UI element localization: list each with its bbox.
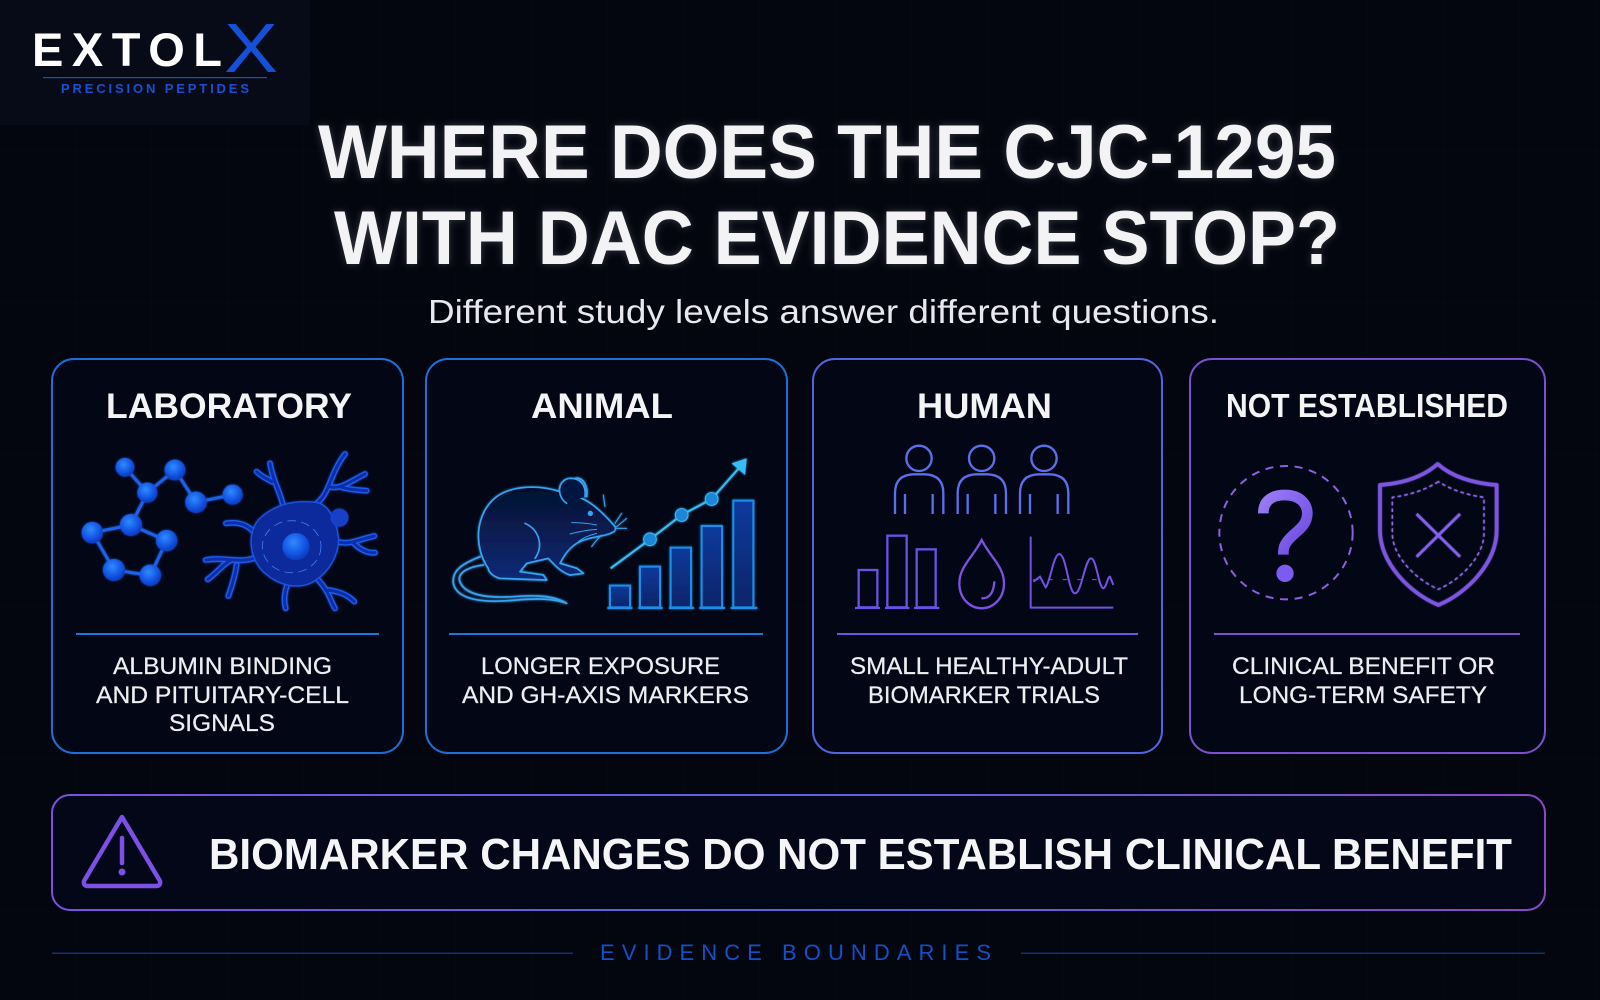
- body text: CLINICAL BENEFIT OR: [1232, 653, 1495, 680]
- body text: ALBUMIN BINDING: [113, 653, 332, 680]
- icon: bars: [855, 536, 939, 608]
- divider: [449, 633, 763, 635]
- icon: rat: [453, 478, 627, 603]
- heading: laboratory: LABORATORY: [106, 387, 352, 426]
- body text: AND PITUITARY-CELL: [96, 682, 349, 709]
- banner text: BIOMARKER CHANGES DO NOT ESTABLISH CLINICAL BENEFIT: [209, 830, 1512, 879]
- logo: [0, 0, 310, 125]
- icon: question mark in dashed circle: [1219, 466, 1353, 599]
- icon: biomarker waveform: [1031, 537, 1113, 608]
- panel: laboratory: [52, 359, 403, 753]
- body text: SIGNALS: [169, 710, 275, 737]
- body text: AND GH-AXIS MARKERS: [462, 682, 749, 709]
- body text: [850, 653, 1128, 709]
- icon: warning triangle: [84, 817, 160, 886]
- subtitle: Different study levels answer different questions.: [428, 293, 1219, 330]
- panel: animal: [426, 359, 787, 753]
- heading: animal: ANIMAL: [531, 387, 673, 426]
- logo: PRECISION PEPTIDES: [61, 81, 249, 96]
- divider: [76, 633, 379, 635]
- footer: evidence boundaries: EVIDENCE BOUNDARIES: [600, 940, 991, 965]
- body text: SMALL HEALTHY-ADULT: [850, 653, 1128, 680]
- divider: [837, 633, 1138, 635]
- title: WHERE DOES THE CJC-1295: [318, 110, 1336, 195]
- body text: LONG-TERM SAFETY: [1239, 682, 1487, 709]
- logo: X: [224, 9, 278, 87]
- title: WITH DAC EVIDENCE STOP?: [334, 196, 1340, 281]
- icon: three people: [895, 446, 1068, 514]
- heading: not established: NOT ESTABLISHED: [1226, 387, 1508, 424]
- icon: molecule: [82, 458, 243, 586]
- heading: human: HUMAN: [917, 387, 1052, 426]
- body text: [462, 653, 749, 709]
- icon: blood drop: [959, 540, 1004, 608]
- panel: not established: [1190, 359, 1545, 753]
- body text: [1232, 653, 1495, 709]
- title: [318, 110, 1340, 281]
- icon: shield with cross: [1380, 464, 1497, 605]
- chart: rising bars and arrow: [607, 458, 757, 608]
- icon: pituitary cell: [206, 454, 375, 608]
- logo: EXTOL: [32, 23, 222, 76]
- body text: BIOMARKER TRIALS: [868, 682, 1100, 709]
- banner: biomarker warning: [52, 795, 1545, 910]
- panel: human: [813, 359, 1162, 753]
- body text: [96, 653, 349, 737]
- body text: LONGER EXPOSURE: [481, 653, 720, 680]
- divider: [1214, 633, 1520, 635]
